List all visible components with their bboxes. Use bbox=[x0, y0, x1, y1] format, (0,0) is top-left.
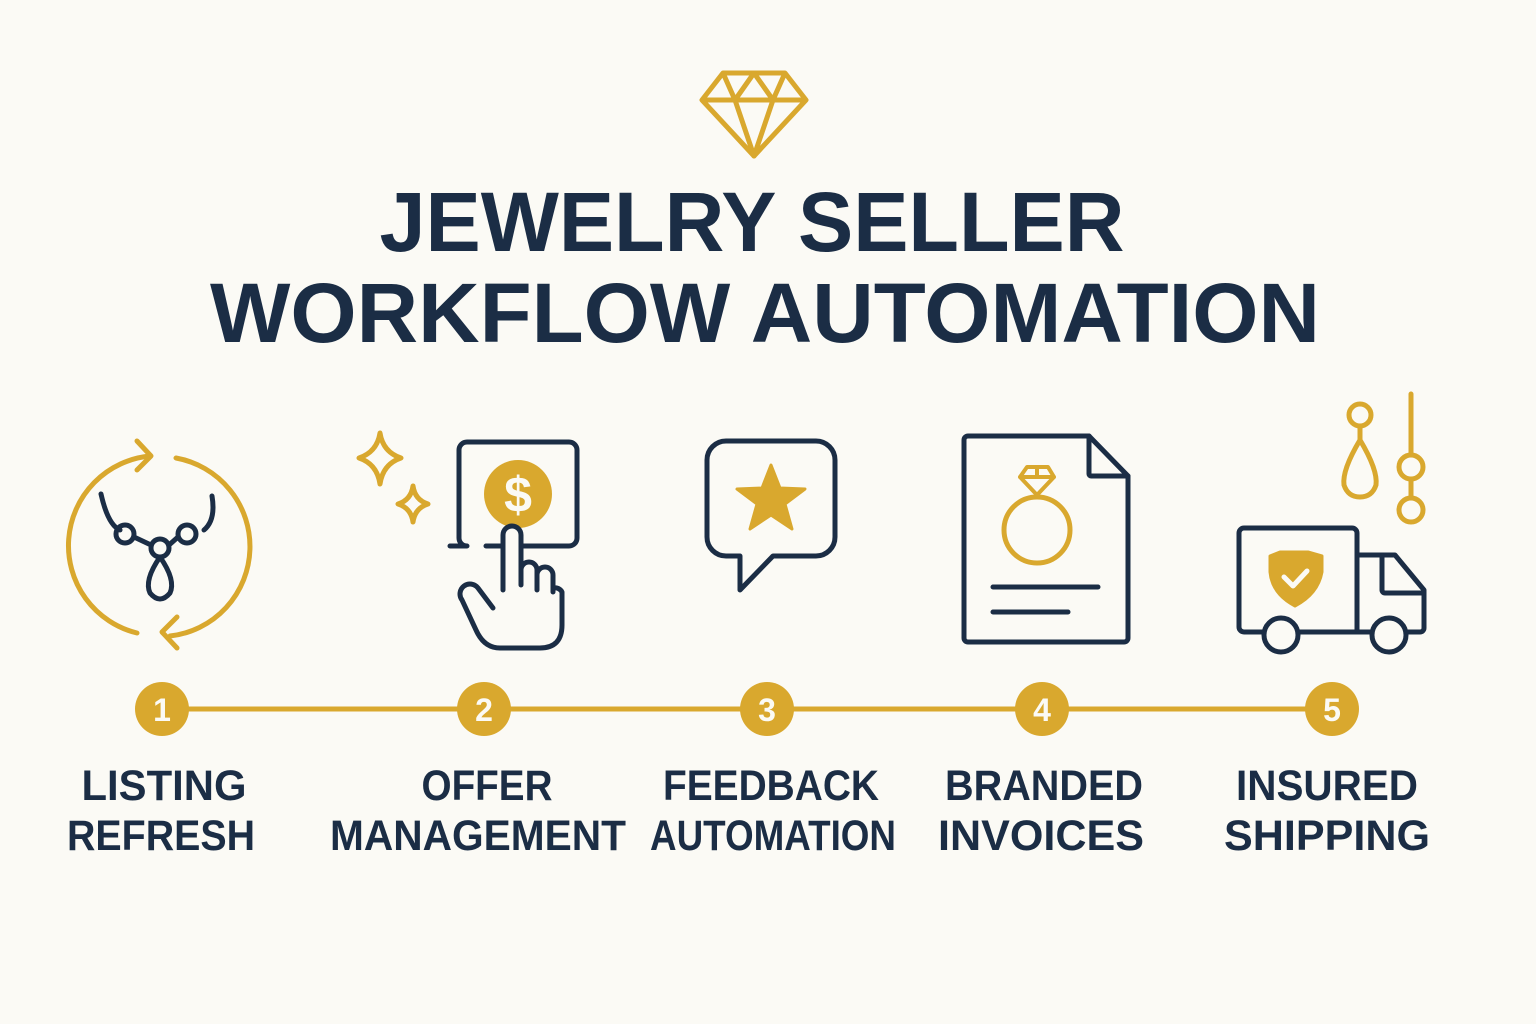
icon: offer management bbox=[359, 433, 577, 648]
labels: LISTING bbox=[82, 762, 246, 810]
labels: AUTOMATION bbox=[650, 812, 896, 860]
title: WORKFLOW AUTOMATION bbox=[210, 266, 1320, 360]
icon: offer management: $ bbox=[504, 467, 532, 523]
timeline: 5 bbox=[1323, 692, 1341, 728]
icon: listing refresh bbox=[68, 441, 250, 648]
labels: SHIPPING bbox=[1224, 812, 1430, 860]
title bbox=[210, 175, 1320, 360]
labels bbox=[67, 762, 1430, 860]
icon: branded invoices bbox=[964, 436, 1128, 642]
timeline bbox=[135, 682, 1359, 736]
timeline: 4 bbox=[1033, 692, 1051, 728]
timeline: 2 bbox=[475, 692, 493, 728]
icon: feedback bbox=[707, 441, 835, 590]
labels: FEEDBACK bbox=[663, 762, 879, 810]
title: JEWELRY SELLER bbox=[380, 175, 1124, 269]
icon: insured shipping bbox=[1239, 394, 1424, 652]
labels: OFFER bbox=[422, 762, 552, 810]
labels: INVOICES bbox=[938, 812, 1144, 860]
icon: diamond bbox=[702, 73, 806, 156]
timeline: 1 bbox=[153, 692, 171, 728]
labels: BRANDED bbox=[945, 762, 1143, 810]
labels: MANAGEMENT bbox=[330, 812, 626, 860]
labels: REFRESH bbox=[67, 812, 255, 860]
labels: INSURED bbox=[1236, 762, 1418, 810]
timeline: 3 bbox=[758, 692, 776, 728]
